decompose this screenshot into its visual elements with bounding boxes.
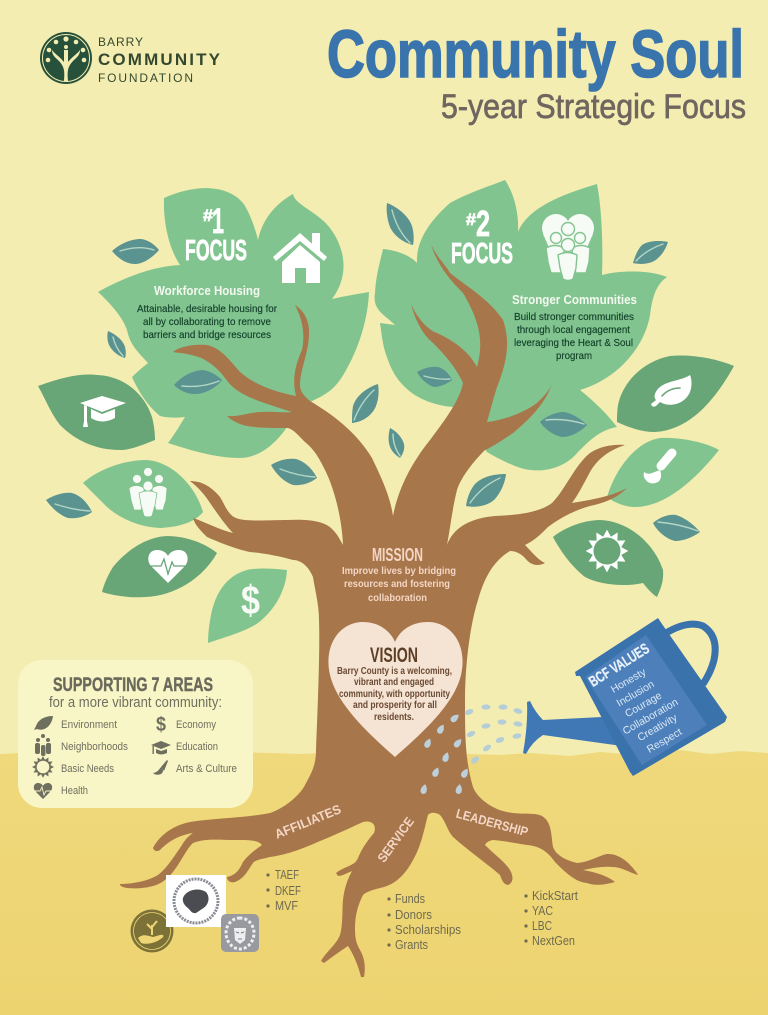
small leaf [633,241,668,264]
icon: legend education [151,741,171,754]
logo emblem [40,32,92,84]
label: health: Health [61,785,88,797]
mission description [342,565,456,604]
logo wordmark: BARRY [98,35,143,49]
small leaf [653,515,700,541]
can spout [523,701,622,754]
focus 2 description: through local engagement [517,324,630,336]
focus 1 description: Attainable, desirable housing for [137,303,277,315]
list: affiliates: DKEF [275,884,301,898]
logo wordmark: FOUNDATION [98,71,193,85]
list: service: Funds [395,892,425,906]
leaf: health [102,536,217,597]
can values text: Courage [623,690,664,720]
small leaf [107,331,126,358]
vision description: residents. [374,712,414,723]
list: service: Scholarships [395,923,461,937]
can values text: Respect [645,726,684,756]
leaf: basic needs [553,520,663,597]
icon: heart and people [542,214,594,280]
label: basic needs: Basic Needs [61,763,114,775]
watering can [523,618,727,776]
icon: legend basic needs [32,756,54,778]
logo wordmark: COMMUNITY [98,50,221,69]
icon: neighborhood team [129,468,167,517]
logo: panther foundation badge [166,875,226,927]
icon: legend arts [153,760,168,775]
can values text: Honesty [609,666,649,696]
label: arts and culture: Arts & Culture [176,763,237,775]
small leaf [271,459,317,485]
focus 2 description: program [556,350,592,362]
icon: legend economy: $ [156,714,166,736]
focus 2 description [514,311,634,362]
small leaf [417,367,452,387]
can values text: BCF VALUES [586,640,653,691]
logo: plant in hand badge [130,910,174,952]
focus 1 description: all by collaborating to remove [143,316,271,328]
label: economy: Economy [176,719,216,731]
focus 1 number [203,202,224,241]
label: neighborhoods: Neighborhoods [61,741,128,753]
logo: lion badge [221,914,259,952]
list: affiliates [266,868,301,913]
vision description [337,666,452,723]
focus 1 heading: Workforce Housing [154,284,260,298]
can body [575,618,727,776]
water drops [420,704,523,795]
small leaf [112,239,159,264]
mission heading: MISSION [372,545,423,565]
focus 1 description [137,303,277,341]
root label: service: SERVICE [374,814,417,865]
vision heading: VISION [370,644,418,667]
small leaf [46,493,92,518]
icon: dollar: $ [241,577,260,623]
focus 2 number: 2 [476,203,490,244]
focus 2 label: FOCUS [451,238,513,270]
focus 2 heading: Stronger Communities [512,293,637,307]
root label: affiliates: AFFILIATES [273,801,343,842]
can values text: Creativity [636,711,680,744]
leaf: economy [208,568,287,643]
logo [40,32,221,85]
leaf: neighborhoods [83,460,203,528]
leaf: arts and culture [607,438,719,507]
tree trunk with branches and roots [120,244,638,977]
icon: house [273,233,327,283]
focus 2 description: Build stronger communities [514,311,634,323]
vision description: Barry County is a welcoming, [337,666,452,677]
focus 1 description: barriers and bridge resources [143,329,271,341]
label: education: Education [176,741,218,753]
list: leadership: NextGen [532,934,575,948]
legend subheading: for a more vibrant community: [49,695,222,711]
panel: focus 2 leaf cluster [375,180,667,470]
small leaf [389,428,404,458]
root label: leadership: LEADERSHIP [454,806,530,839]
leaf: education [38,375,155,450]
can handle [666,624,715,684]
vision description: and prosperity for all [353,700,437,711]
text block: mission [342,545,456,604]
list: leadership: KickStart [532,889,578,903]
list: leadership: LBC [532,919,552,933]
icon: legend neighborhoods [35,734,51,756]
vision description: community, with opportunity [339,689,450,700]
can values text: Collaboration [621,696,680,738]
icon: environment leaf [651,375,692,407]
focus 1 label: FOCUS [185,235,247,267]
legend heading: SUPPORTING 7 AREAS [53,675,213,696]
label: environment: Environment [61,719,117,731]
text block: focus 1 [137,202,277,341]
can label panel [585,635,707,765]
list: leadership [524,889,578,948]
focus 2 number [466,203,490,244]
vision heart [328,622,463,757]
logo wordmark [98,35,221,85]
focus 2 description: leveraging the Heart & Soul [514,337,633,349]
icon: legend environment [34,716,53,730]
list: leadership: YAC [532,904,553,918]
list: service [387,892,461,952]
mission description: Improve lives by bridging [342,565,456,577]
can values text [586,640,684,756]
text block: focus 2 [451,203,637,362]
leaf: environment [617,355,734,432]
small teal leaves [46,203,700,541]
small leaf [174,370,222,394]
focus 1 number: # [203,206,214,225]
icon: legend health [34,783,52,799]
small leaf [387,203,414,245]
mission description: resources and fostering [344,578,450,590]
panel: focus 1 leaf cluster [98,188,369,458]
list: affiliates: MVF [275,899,298,913]
ground [0,750,768,1015]
panel: supporting 7 areas legend [18,660,253,808]
mission description: collaboration [368,592,427,604]
list: service: Donors [395,908,432,922]
icon: health heart [146,550,190,583]
list: affiliates: TAEF [275,868,299,882]
small leaf [466,474,506,507]
list: service: Grants [395,938,428,952]
focus 2 number: # [466,210,477,229]
can values text: Inclusion [615,678,657,709]
icon: paint brush [644,453,672,483]
icon: sun [586,530,628,572]
focus 1 number: 1 [212,202,224,241]
small leaf [352,384,379,423]
small leaf [540,412,587,437]
vision description: vibrant and engaged [354,677,434,688]
icon: graduation cap [80,396,126,427]
